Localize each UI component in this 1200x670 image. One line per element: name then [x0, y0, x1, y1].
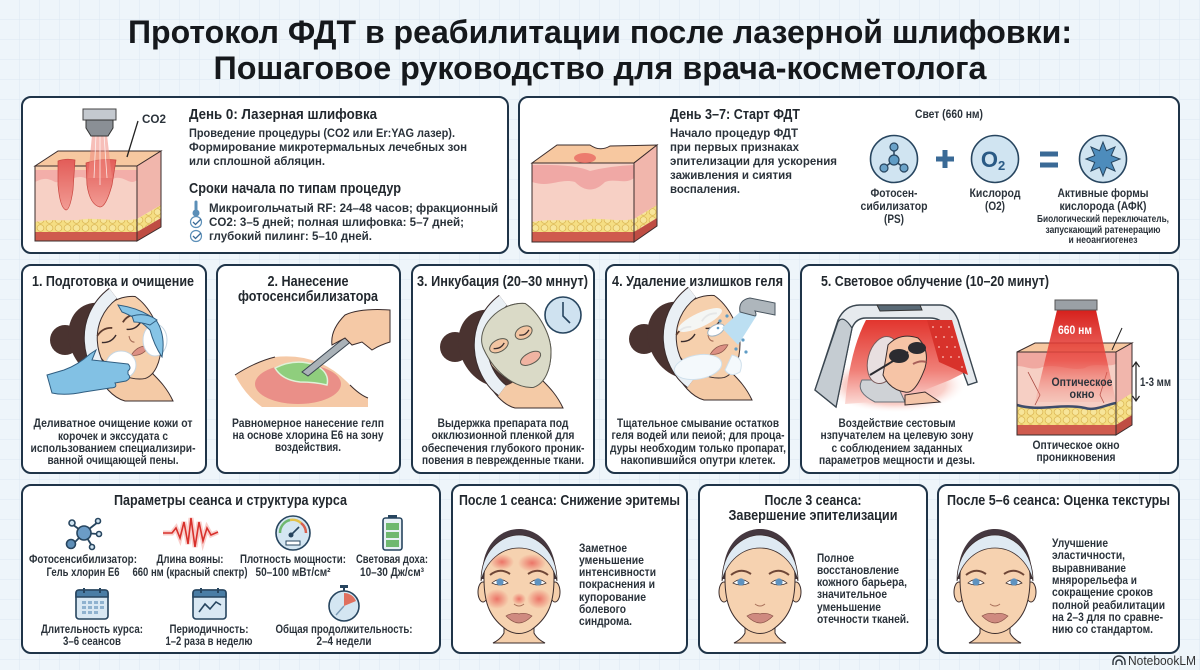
parameter: power density	[240, 516, 346, 579]
icon: oxygen: O	[981, 147, 998, 172]
text: step 5: нзпучателем на целевую зону	[820, 428, 974, 442]
text: day 3-7 description	[670, 107, 837, 196]
heading: 3. Инкубация (20–30 мннут)	[417, 274, 588, 290]
text: session 1 result: Заметное	[579, 541, 627, 555]
illustration: face with occlusive mask	[440, 287, 567, 410]
heading: Параметры сеанса и структура курса	[114, 493, 348, 509]
label: reactive oxygen species	[1037, 186, 1169, 246]
text: step 1: Деливатное очищение кожи от	[34, 416, 193, 430]
illustration: LED light device over patient	[815, 305, 977, 413]
title	[128, 14, 1072, 86]
panel: after session 3	[699, 485, 927, 653]
parameter: total duration	[276, 585, 412, 648]
illustration: clear face	[719, 529, 801, 643]
text: day 3-7 description: воспаления.	[670, 182, 740, 196]
icon: oxygen	[972, 136, 1018, 182]
text: session 1 result: синдрома.	[579, 614, 632, 628]
panel: step 2 application	[217, 265, 400, 473]
heading: Завершение эпителизации	[728, 508, 898, 524]
diagram: optical window skin cross-section: Оптическое	[1052, 375, 1113, 389]
text: step 3	[422, 416, 585, 467]
text: step 5	[819, 416, 975, 467]
text: session 3 result: отечности тканей.	[817, 612, 909, 626]
list: timing by procedure type: Сроки начала по типам процедур	[189, 181, 401, 197]
text: day 3-7 description: День 3–7: Старт ФДТ	[670, 107, 800, 123]
text: session 3 result: значительное	[817, 587, 887, 601]
text: session 5-6 result: полной реабилитации	[1052, 598, 1165, 612]
text: session 1 result: интенсивности	[579, 565, 656, 579]
diagram: optical window skin cross-section	[1017, 300, 1171, 464]
diagram: optical window skin cross-section: 1-3 мм	[1140, 375, 1171, 389]
text: step 1: ванной очищающей пены.	[48, 453, 178, 467]
text: session 5-6 result: Улучшение	[1052, 536, 1108, 550]
heading: фотосенсибилизатора	[238, 289, 379, 305]
text: step 5: с соблюдением заданных	[832, 441, 963, 455]
text: day 0 description: Формирование микротермальных лечебных зон	[189, 140, 467, 154]
heading: 5. Световое облучение (10–20 минут)	[821, 274, 1049, 290]
illustration: rinsing gel from face	[629, 279, 775, 402]
label: oxygen: (O2)	[985, 199, 1005, 213]
panel: step 1 cleansing	[22, 265, 206, 473]
diagram: optical window skin cross-section: окно	[1070, 387, 1094, 401]
label: reactive oxygen species: Биологический переключатель,	[1037, 214, 1169, 225]
parameter: photosensitizer: Фотосенсибилизатор:	[29, 552, 137, 566]
text: session 3 result: кожного барьера,	[817, 575, 907, 589]
text: day 0 description: или сплошной абляцин.	[189, 154, 325, 168]
text: step 1: корочек и экссудата с	[58, 429, 168, 443]
text: step 3: окклюзионной пленкой для	[432, 428, 574, 442]
text: session 1 result: уменьшение	[579, 553, 644, 567]
text: session 5-6 result: выравнивание	[1052, 561, 1126, 575]
parameter: wavelength	[132, 518, 248, 579]
text: step 2	[232, 416, 384, 454]
heading: 1. Подготовка и очищение	[32, 274, 194, 290]
text: session 3 result: уменьшение	[817, 600, 881, 614]
parameter: course length: 3–6 сеансов	[63, 634, 121, 648]
label: photosensitizer: Фотосен-	[870, 186, 918, 200]
parameter: frequency: Периодичность:	[170, 622, 248, 636]
text: session 5-6 result: на 2–3 для по сравне-	[1052, 610, 1163, 624]
label: reactive oxygen species: запускающий ратенерацию	[1046, 225, 1161, 236]
text: session 5-6 result: мнярорельефа и	[1052, 573, 1137, 587]
heading: После 5–6 сеанса: Оценка текстуры	[947, 493, 1170, 509]
list: timing by procedure type	[189, 181, 498, 243]
text: step 2: на основе хлорина Е6 на зону	[232, 428, 384, 442]
illustration: skin block with CO2 laser	[35, 109, 166, 241]
parameter: wavelength: 660 нм (красный спектр)	[132, 565, 248, 579]
text: step 4: дуры необходим только пропарат,	[610, 441, 786, 455]
parameter: course length: Длительность курса:	[41, 622, 143, 636]
text: step 4: накопившийся опутри клетек.	[620, 453, 776, 467]
panel: step 3 incubation	[412, 265, 594, 473]
text: session 1 result: болевого	[579, 602, 626, 616]
text: session 5-6 result: эластичности,	[1052, 548, 1125, 562]
text: session 1 result	[579, 541, 656, 628]
text: step 5: Воздействие сестовым	[838, 416, 956, 430]
heading: После 1 сеанса: Снижение эритемы	[459, 493, 680, 509]
text: step 3: повения в певрежденные ткани.	[422, 453, 584, 467]
title: Пошаговое руководство для врача-косметолога	[214, 50, 987, 86]
text: step 5: параметров мещности и дезы.	[819, 453, 975, 467]
icon: clock	[545, 297, 581, 333]
text: session 3 result	[817, 551, 909, 626]
illustration: smooth face	[954, 529, 1036, 643]
illustration: face with redness	[478, 529, 560, 643]
text: step 2: воздействия.	[275, 440, 341, 454]
illustration: skin block with CO2 laser: CO2	[142, 112, 166, 126]
text: step 3: обеспечения глубокого проник-	[422, 441, 585, 455]
label: reactive oxygen species: и неоангиогенез	[1068, 235, 1138, 246]
parameter: power density: 50–100 мВт/см²	[256, 565, 330, 579]
parameter: photosensitizer: Гель хлорин Е6	[46, 565, 120, 579]
heading	[238, 274, 379, 305]
text: session 5-6 result: сокращение сроков	[1052, 585, 1153, 599]
parameter: total duration: Общая продолжительность:	[276, 622, 412, 636]
parameter: light dose: Световая доха:	[356, 552, 428, 566]
illustration: face cleansing with gloves	[47, 280, 177, 403]
text: day 3-7 description: при первых признаках	[670, 140, 799, 154]
panel: day 3-7 PDT start	[519, 97, 1179, 253]
label: photosensitizer: (PS)	[884, 212, 904, 226]
heading: 2. Нанесение	[268, 274, 348, 290]
label: photosensitizer: сибилизатор	[860, 199, 928, 213]
panel: session parameters	[22, 485, 440, 653]
text: session 1 result: покраснения и	[579, 577, 655, 591]
list: timing by procedure type: CO2: 3–5 дней; полная шлифовка: 5–7 дней;	[209, 215, 464, 229]
text: session 5-6 result	[1052, 536, 1165, 636]
label: light wavelength: Свет (660 нм)	[915, 109, 983, 121]
label: oxygen: Кислород	[970, 186, 1021, 200]
icon: plus sign	[936, 150, 954, 168]
parameter: course length	[41, 588, 143, 648]
parameter: photosensitizer	[29, 518, 137, 579]
diagram: optical window skin cross-section: 660 нм	[1058, 325, 1092, 337]
text: step 3: Выдержка препарата под	[438, 416, 569, 430]
panel: after session 1	[452, 485, 687, 653]
text: day 0 description: Проведение процедуры (CO2 или Er:YAG лазер).	[189, 126, 455, 140]
label: photosensitizer	[860, 186, 928, 226]
text: session 3 result: Полное	[817, 551, 854, 565]
text: step 1	[30, 416, 196, 467]
parameter: light dose	[356, 515, 428, 579]
parameter: light dose: 10–30 Дж/см³	[360, 565, 424, 579]
text: step 4: геля водей или пеиой; для проца-	[612, 428, 785, 442]
icon: oxygen: 2	[998, 158, 1005, 173]
label: reactive oxygen species: Активные формы	[1058, 186, 1148, 200]
parameter: frequency: 1–2 раза в неделю	[166, 634, 252, 648]
illustration: applying gel with spatula	[235, 310, 390, 407]
icon: reactive oxygen star	[1080, 136, 1126, 182]
parameter: power density: Плотность мощности:	[240, 552, 346, 566]
watermark: NotebookLM: NotebookLM	[1128, 653, 1196, 668]
icon: equals sign	[1040, 154, 1058, 165]
text: step 1: использованием специализири-	[30, 441, 196, 455]
panel: day 0 laser resurfacing	[22, 97, 508, 253]
list: timing by procedure type: Микроигольчатый RF: 24–48 часов; фракционный	[209, 201, 498, 215]
heading	[728, 493, 898, 524]
parameter: frequency	[166, 588, 252, 648]
label: reactive oxygen species: кислорода (АФК)	[1060, 199, 1147, 213]
parameter: wavelength: Длина вояны:	[156, 552, 224, 566]
illustration: healing skin block	[532, 145, 657, 242]
text: step 4	[610, 416, 786, 467]
text: session 3 result: восстановление	[817, 563, 899, 577]
text: day 0 description	[189, 107, 467, 168]
parameter: total duration: 2–4 недели	[316, 634, 372, 648]
text: day 3-7 description: заживления и сиятия	[670, 168, 792, 182]
diagram: optical window skin cross-section: Оптическое окно	[1032, 438, 1120, 452]
diagram: optical window skin cross-section: проникновения	[1036, 450, 1116, 464]
text: day 3-7 description: Начало процедур ФДТ	[670, 126, 799, 140]
text: day 3-7 description: эпителизации для ускорения	[670, 154, 837, 168]
text: session 1 result: купорование	[579, 590, 646, 604]
panel: step 4 removal	[606, 265, 789, 473]
title: Протокол ФДТ в реабилитации после лазерной шлифовки:	[128, 14, 1072, 50]
heading: 4. Удаление излишков геля	[612, 274, 783, 290]
text: step 4: Тщательное смывание остатков	[617, 416, 779, 430]
text: session 5-6 result: нию со стандартом.	[1052, 622, 1153, 636]
icon: photosensitizer molecule	[870, 136, 918, 182]
label: oxygen	[970, 186, 1021, 213]
list: timing by procedure type: глубокий пилинг: 5–10 дней.	[209, 229, 372, 243]
text: day 0 description: День 0: Лазерная шлифовка	[189, 107, 378, 123]
panel: after session 5-6	[938, 485, 1179, 653]
text: step 2: Равномерное нанесение гелп	[232, 416, 384, 430]
heading: После 3 сеанса:	[764, 493, 862, 509]
panel: step 5 light exposure	[801, 265, 1178, 473]
